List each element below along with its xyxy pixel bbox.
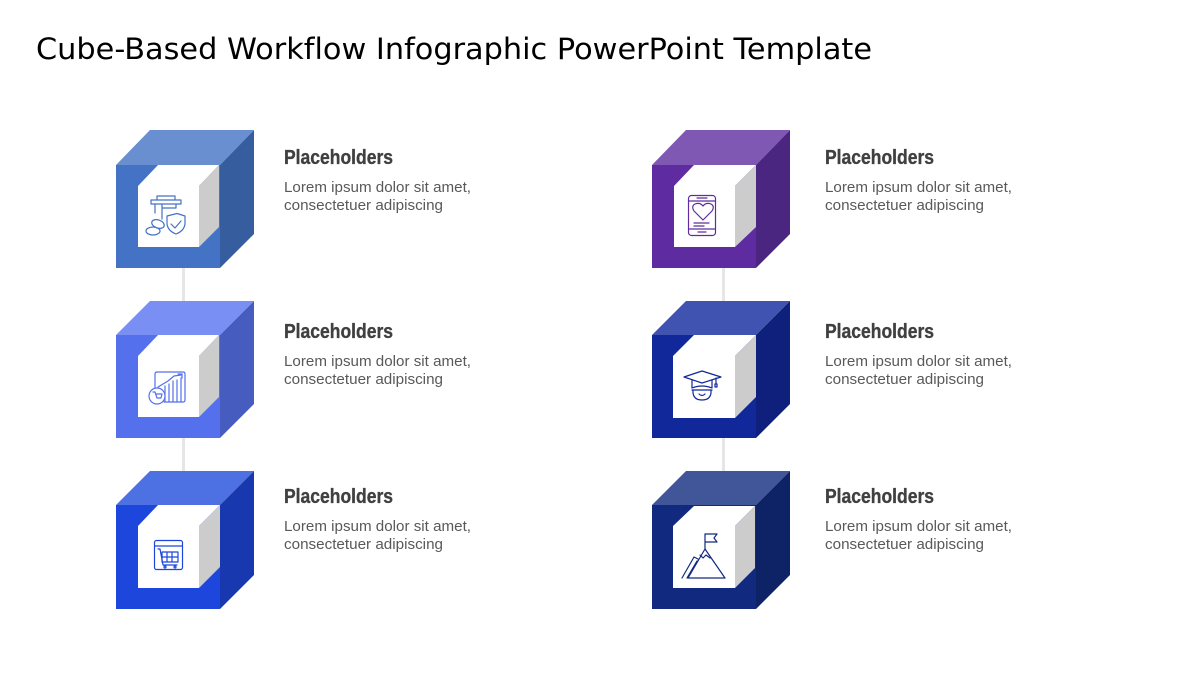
- text block 5: Placeholders: [825, 321, 934, 343]
- text block 3: Lorem ipsum dolor sit amet,: [284, 519, 471, 535]
- text block 3: Placeholders: [284, 486, 393, 508]
- text block 1: consectetuer adipiscing: [284, 198, 443, 214]
- connector: left column bottom: [182, 438, 185, 471]
- text block 1: Placeholders: [284, 147, 393, 169]
- text block 6: consectetuer adipiscing: [825, 537, 984, 553]
- text block 2: Lorem ipsum dolor sit amet,: [284, 354, 471, 370]
- text block 1: [284, 147, 471, 214]
- connector: left column top: [182, 268, 185, 301]
- text block 6: Placeholders: [825, 486, 934, 508]
- text block 3: consectetuer adipiscing: [284, 537, 443, 553]
- title: Cube-Based Workflow Infographic PowerPoint Template: [36, 32, 872, 66]
- connector: right column top: [722, 268, 725, 301]
- icon: tools, pills and shield: [146, 196, 185, 235]
- cube 3: royal blue with shopping cart icon: [116, 471, 254, 609]
- text block 2: [284, 321, 471, 388]
- text block 2: Placeholders: [284, 321, 393, 343]
- text block 5: Lorem ipsum dolor sit amet,: [825, 354, 1012, 370]
- cube 4: purple with phone heart icon: [652, 130, 790, 268]
- icon: browser shopping cart: [154, 540, 182, 570]
- text block 4: Lorem ipsum dolor sit amet,: [825, 180, 1012, 196]
- text block 5: [825, 321, 1012, 388]
- text block 6: Lorem ipsum dolor sit amet,: [825, 519, 1012, 535]
- text block 6: [825, 486, 1012, 553]
- text block 4: Placeholders: [825, 147, 934, 169]
- icon: mountain with flag: [682, 534, 725, 578]
- cube 5: navy blue with graduate icon: [652, 301, 790, 438]
- icon: growth chart and cart: [149, 372, 185, 404]
- text block 3: [284, 486, 471, 553]
- text block 2: consectetuer adipiscing: [284, 372, 443, 388]
- cube 2: periwinkle with chart icon: [116, 301, 254, 438]
- text block 4: [825, 147, 1012, 214]
- text block 4: consectetuer adipiscing: [825, 198, 984, 214]
- connector: right column bottom: [722, 438, 725, 471]
- icon: graduate with cap: [684, 371, 721, 400]
- cube 6: dark navy with mountain flag icon: [652, 471, 790, 609]
- text block 5: consectetuer adipiscing: [825, 372, 984, 388]
- icon: phone with heart: [688, 196, 716, 236]
- cube 1: blue with shield icon: [116, 130, 254, 268]
- text block 1: Lorem ipsum dolor sit amet,: [284, 180, 471, 196]
